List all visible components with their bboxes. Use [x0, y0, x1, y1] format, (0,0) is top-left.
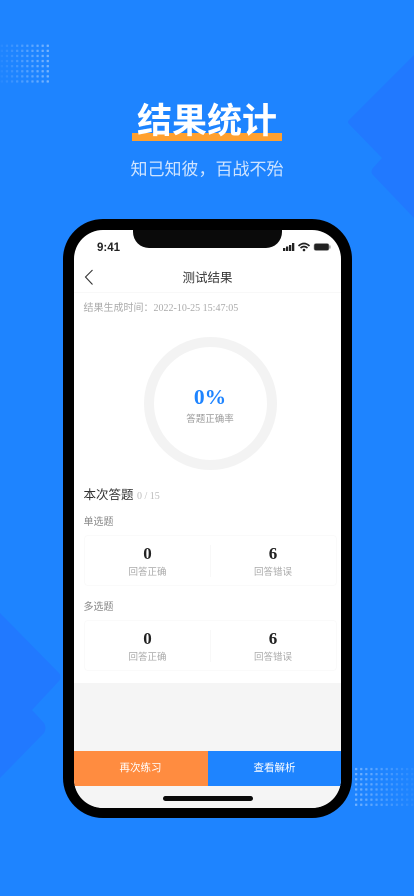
accuracy label: 答题正确率 [186, 414, 234, 425]
wrong label: 回答错误 [254, 567, 292, 578]
title: 结果统计 [137, 102, 277, 141]
title underline [132, 133, 282, 141]
nav divider [74, 292, 342, 293]
status bar time: 9:41 [97, 242, 120, 254]
subtitle: 知己知彼，百战不殆 [130, 160, 284, 179]
correct label: 回答正确 [128, 652, 166, 663]
wrong count: 6 [269, 544, 277, 563]
accuracy value: 0% [194, 385, 226, 409]
correct count: 0 [143, 544, 152, 563]
back arrow [84, 270, 93, 285]
accuracy ring [144, 337, 276, 470]
single choice label: 单选题 [84, 517, 114, 528]
notch [133, 230, 282, 248]
multiple choice card [84, 620, 336, 671]
phone screen [74, 230, 341, 808]
card divider [210, 630, 211, 662]
retry button: 再次练习 [120, 762, 162, 774]
status bar icons [283, 242, 330, 252]
grey lower area [74, 683, 342, 808]
review button [208, 751, 342, 786]
card divider [210, 545, 211, 577]
nav title: 测试结果 [182, 271, 232, 285]
section heading: 本次答题 0 / 15 [84, 488, 160, 502]
single choice card [84, 535, 336, 586]
generated time: 结果生成时间：2022-10-25 15:47:05 [84, 303, 238, 314]
wrong count: 6 [269, 629, 277, 648]
phone frame [63, 219, 352, 818]
wrong label: 回答错误 [254, 652, 292, 663]
correct count: 0 [143, 629, 152, 648]
multiple choice label: 多选题 [84, 602, 114, 613]
home indicator [162, 796, 252, 801]
review button: 查看解析 [254, 762, 296, 774]
retry button [74, 751, 208, 786]
correct label: 回答正确 [128, 567, 166, 578]
